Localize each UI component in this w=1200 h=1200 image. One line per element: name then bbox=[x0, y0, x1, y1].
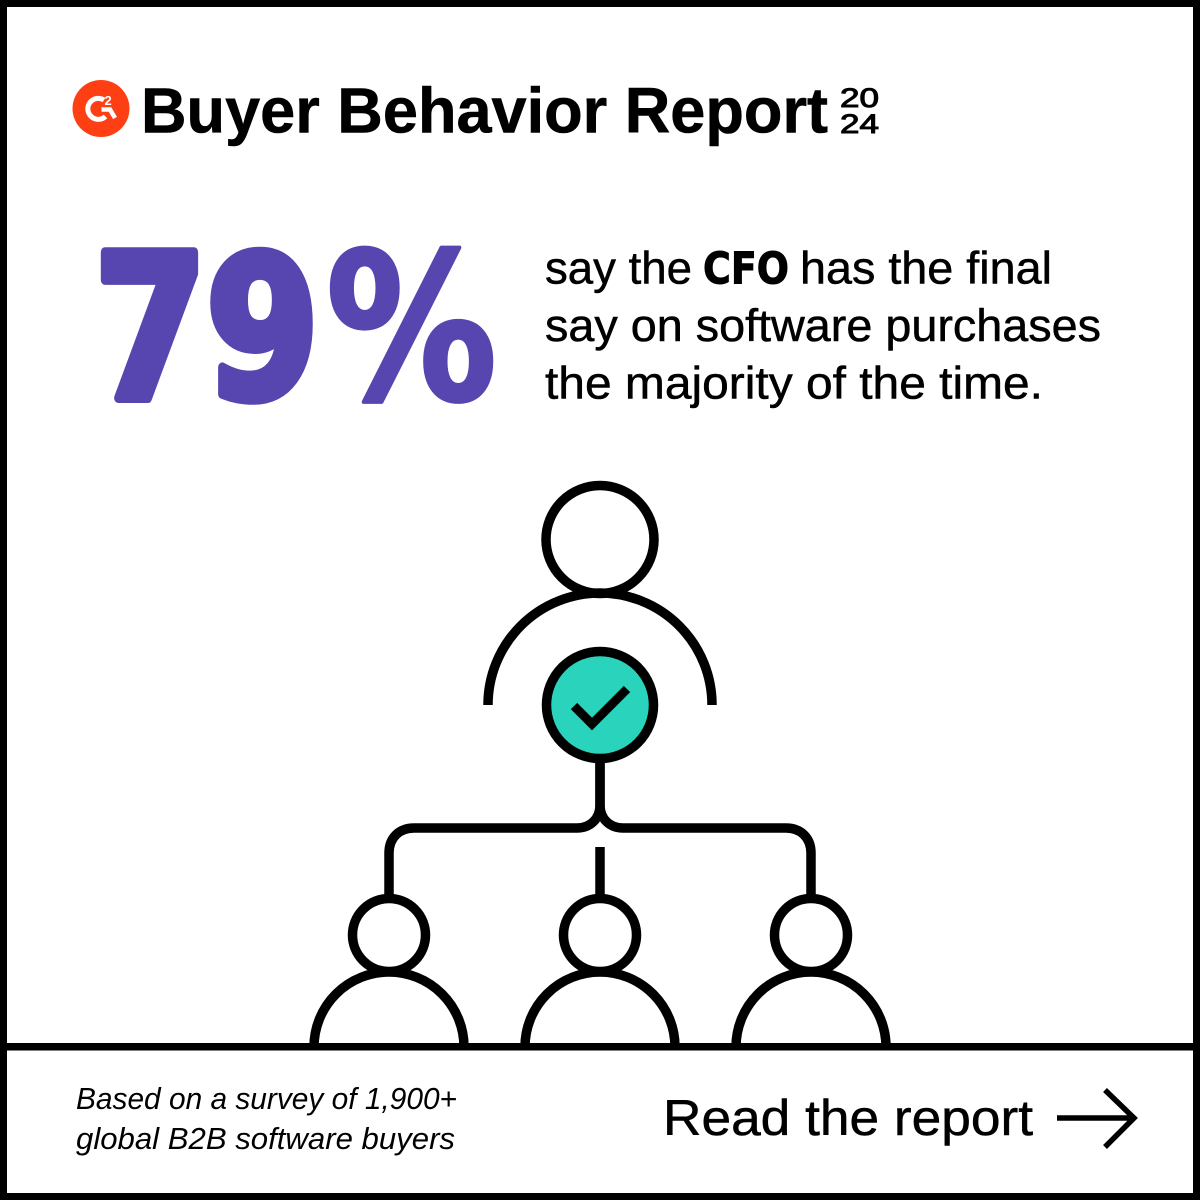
statistic description: has the final bbox=[800, 242, 1052, 294]
year stacked: 24 bbox=[840, 109, 879, 139]
header: logo and report title bbox=[72, 74, 879, 146]
hierarchy illustration bbox=[314, 486, 886, 1047]
icon: person right bbox=[736, 898, 886, 1047]
icon: teal check badge bbox=[546, 652, 654, 758]
icon: person middle bbox=[525, 898, 675, 1047]
statistic description: the majority of the time. bbox=[545, 358, 1043, 408]
statistic description: CFO bbox=[703, 244, 789, 294]
footer survey note bbox=[76, 1081, 457, 1156]
call to action: Read the report bbox=[663, 1090, 1033, 1146]
icon: person left bbox=[314, 898, 464, 1047]
big statistic 79%: 7 bbox=[94, 213, 207, 446]
year stacked: 20 bbox=[840, 83, 879, 113]
statistic description bbox=[545, 242, 1101, 408]
footer survey note: global B2B software buyers bbox=[76, 1121, 455, 1156]
footer survey note: Based on a survey of 1,900+ bbox=[76, 1081, 457, 1116]
big statistic 79%: 9 bbox=[206, 216, 319, 444]
connector lines bbox=[389, 760, 811, 896]
icon: G2 logo bbox=[72, 80, 130, 137]
statistic description: say on software purchases bbox=[545, 300, 1101, 351]
year stacked bbox=[840, 83, 879, 139]
big statistic 79%: % bbox=[326, 211, 497, 448]
icon: top person bbox=[488, 486, 712, 705]
statistic description: say the bbox=[545, 242, 692, 294]
big statistic 79% bbox=[94, 211, 497, 448]
icon: G2 logo: 2 bbox=[104, 93, 112, 108]
title: Buyer Behavior Report bbox=[141, 74, 828, 146]
icon: arrow bbox=[1057, 1090, 1134, 1147]
